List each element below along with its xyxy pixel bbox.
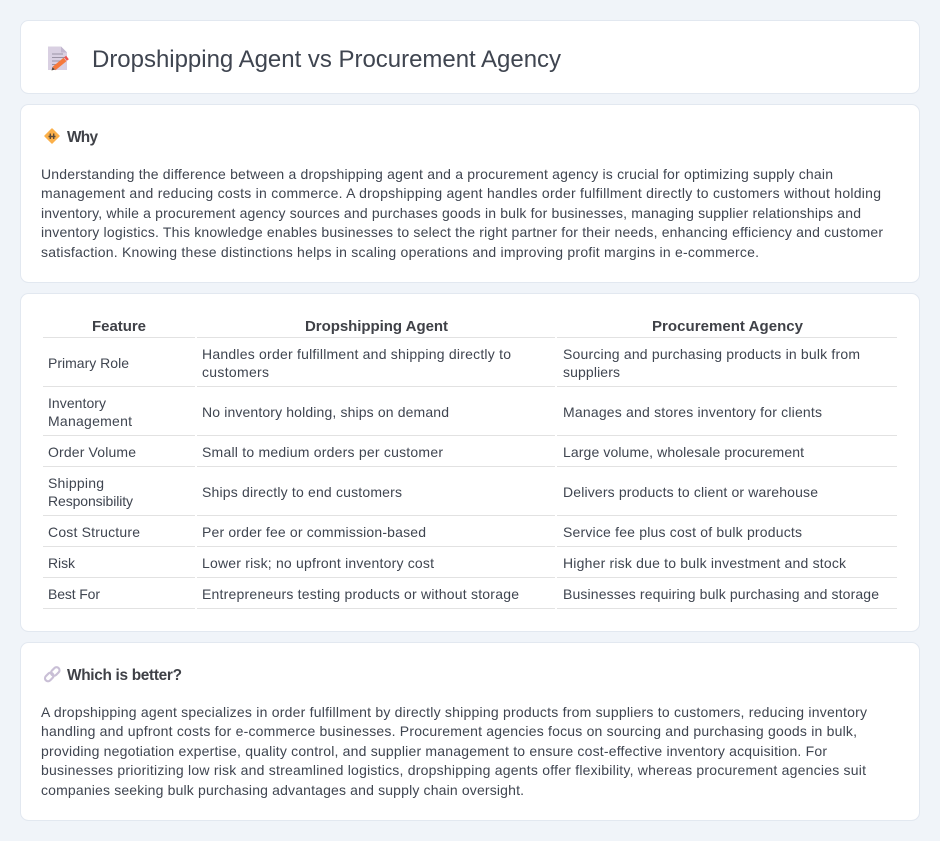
text block: which paragraph <box>41 704 867 798</box>
row: shipping responsibility: Shipping <box>48 475 104 491</box>
row: primary role: Primary Role <box>48 355 129 371</box>
panel: why <box>20 104 920 282</box>
text block: why paragraph: inventory logistics. This knowledge enables businesses to select the right partner for their needs, enhancing efficiency and customer <box>41 224 883 240</box>
row: shipping responsibility: Responsibility <box>48 493 133 509</box>
row: cost structure: Cost Structure <box>48 524 140 540</box>
row: risk <box>48 555 847 571</box>
row: cost structure: Per order fee or commission-based <box>202 524 426 540</box>
row: primary role: Sourcing and purchasing products in bulk from <box>563 346 860 362</box>
row: shipping responsibility: Ships directly to end customers <box>202 484 402 500</box>
text block: why paragraph: management and reducing costs in commerce. A dropshipping agent handles order fulfillment directly to customers without holding <box>41 185 881 201</box>
text block: which paragraph: providing negotiation expertise, quality control, and supplier management to ensure cost-effective inventory acquisition. For <box>41 743 827 759</box>
row: best for: Best For <box>48 586 100 602</box>
text block: which paragraph: businesses prioritizing low risk and streamlined logistics, dropshipping agents offer flexibility, whereas procurement agencies suit <box>41 762 866 778</box>
text block: which paragraph: companies seeking bulk purchasing advantages and supply chain oversight. <box>41 782 524 798</box>
row: primary role: Handles order fulfillment and shipping directly to <box>202 346 511 362</box>
row: inventory management: Inventory <box>48 395 106 411</box>
icon: document with pencil <box>48 46 68 70</box>
title: Dropshipping Agent vs Procurement Agency <box>92 46 561 73</box>
row: risk: Risk <box>48 555 76 571</box>
row: inventory management: Management <box>48 413 132 429</box>
heading: which is better: Which is better? <box>67 667 182 684</box>
row: primary role: customers <box>202 364 269 380</box>
row: risk: Higher risk due to bulk investment and stock <box>563 555 847 571</box>
text block: why paragraph: inventory, while a procurement agency sources and purchases goods in bulk for businesses, managing supplier relationships and <box>41 205 861 221</box>
text block: why paragraph: satisfaction. Knowing these distinctions helps in scaling operations and improving profit margins in e-commerce. <box>41 244 759 260</box>
row: order volume: Small to medium orders per customer <box>202 444 443 460</box>
row: cost structure <box>48 524 802 540</box>
row: cost structure: Service fee plus cost of bulk products <box>563 524 802 540</box>
text block: which paragraph: handling and upfront costs for e-commerce businesses. Procurement agencies focus on sourcing and purchasing goods in bulk, <box>41 723 857 739</box>
row: inventory management <box>48 395 822 429</box>
row: shipping responsibility: Delivers products to client or warehouse <box>563 484 818 500</box>
row: inventory management: Manages and stores inventory for clients <box>563 404 822 420</box>
row: primary role: suppliers <box>563 364 620 380</box>
row: order volume: Large volume, wholesale procurement <box>563 444 804 460</box>
row: risk: Lower risk; no upfront inventory cost <box>202 555 434 571</box>
row: shipping responsibility <box>48 475 818 509</box>
row: order volume: Order Volume <box>48 444 136 460</box>
panel: which is better <box>20 642 920 820</box>
text block: why paragraph <box>41 166 883 260</box>
icon: chain link <box>44 666 61 682</box>
row: best for: Businesses requiring bulk purchasing and storage <box>563 586 879 602</box>
table header: Feature <box>92 318 146 335</box>
table header: Dropshipping Agent <box>305 318 448 335</box>
heading: why: Why <box>67 129 98 146</box>
panel: comparison table <box>20 294 920 632</box>
row: best for <box>48 586 879 602</box>
panel: title header <box>20 20 920 94</box>
icon: orange diamond <box>45 129 59 143</box>
text block: which paragraph: A dropshipping agent specializes in order fulfillment by directly shipping products from suppliers to customers, reducing inventory <box>41 704 867 720</box>
row: best for: Entrepreneurs testing products or without storage <box>202 586 519 602</box>
text block: why paragraph: Understanding the difference between a dropshipping agent and a procurement agency is crucial for optimizing supply chain <box>41 166 833 182</box>
table header: Procurement Agency <box>652 318 804 335</box>
row: primary role <box>48 346 860 380</box>
row: inventory management: No inventory holding, ships on demand <box>202 404 449 420</box>
row: order volume <box>48 444 804 460</box>
table header <box>92 318 804 335</box>
